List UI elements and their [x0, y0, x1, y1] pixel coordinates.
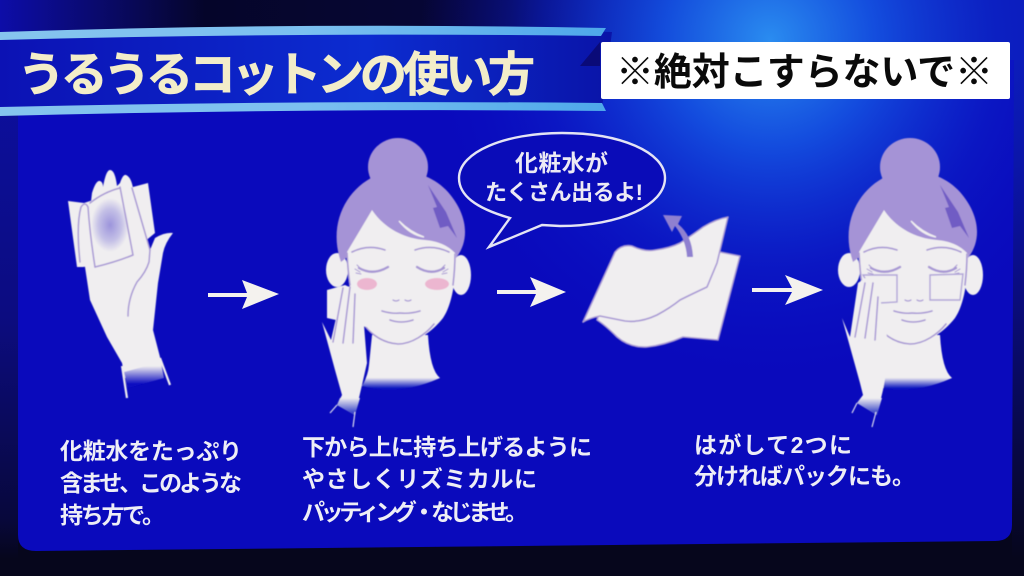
hand [79, 170, 173, 378]
caption: step 2: やさしくリズミカルに [302, 466, 537, 492]
step 2: face with cotton and hand [322, 138, 471, 427]
warning label [601, 42, 1010, 99]
cotton on cheek [327, 285, 373, 327]
title text: うるうるコットンの使い方 [18, 48, 535, 101]
caption: step 2: 下から上に持ち上げるように [302, 434, 592, 460]
arrow 1 [208, 280, 279, 309]
caption: step 3 [694, 432, 915, 489]
arrow 2 [497, 277, 566, 307]
step 1: hand holding cotton [68, 170, 173, 398]
cotton sheet [68, 183, 155, 267]
warning label: ※絶対こすらないで※ [616, 52, 993, 94]
arrow 3 [752, 275, 823, 305]
bubble text: 化粧水が [515, 150, 608, 176]
caption: step 3: はがして2つに [694, 432, 852, 458]
wet area [91, 198, 129, 252]
hand [322, 285, 367, 415]
caption: step 1: 含ませ、このような [60, 470, 242, 496]
hand lines [78, 187, 150, 316]
caption: step 3: 分ければパックにも。 [694, 463, 915, 489]
speech bubble [459, 133, 665, 247]
hand [842, 278, 888, 415]
peel arrow [663, 215, 693, 257]
front sheet [583, 217, 728, 322]
cotton pack patches [863, 274, 963, 303]
speech bubble: たくさん出るよ! [485, 180, 643, 205]
wrist fade [124, 362, 164, 388]
step 3: peeling cotton sheets [583, 215, 740, 347]
cheeks [357, 278, 377, 290]
step 4: face with cotton pack [838, 138, 983, 427]
caption: step 2: パッティング・なじませ。 [302, 499, 528, 525]
caption: step 1: 持ち方で。 [60, 502, 165, 528]
back sheet [597, 252, 740, 347]
caption: step 1: 化粧水をたっぷり [60, 438, 242, 464]
caption: step 2 [302, 434, 592, 525]
caption: step 1 [60, 438, 242, 528]
title banner [0, 26, 612, 116]
